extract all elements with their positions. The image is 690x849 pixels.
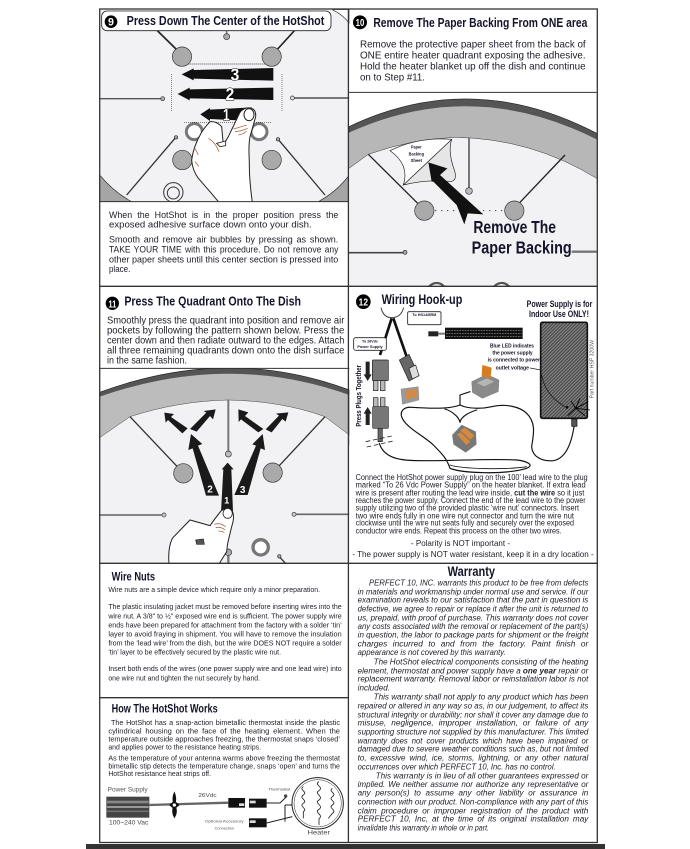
step 9 instructions: TAKE YOUR TIME with this procedure. Do not remove any	[109, 245, 339, 255]
large numbered arrows: 3	[240, 485, 246, 496]
panel: warranty	[358, 563, 589, 833]
how it works text: As the temperature of your antenna warms above freezing the thermostat	[108, 753, 341, 762]
step 9 title bar	[102, 11, 331, 31]
panel: how the HotShot works	[106, 702, 343, 837]
step 12 heading	[356, 292, 462, 309]
callout: blue LED: outlet voltage	[496, 366, 529, 372]
step 12 instructions: two wire ends fully in one wire nut connector and turn the wire nut	[356, 511, 575, 520]
plug: lower pair	[366, 398, 393, 447]
step 12 instructions: marked “To 26 Vdc Power Supply” on the heater blanket. If extra lead	[356, 481, 586, 490]
warranty text: charges incurred to and from the factory. Paint finish or	[358, 640, 589, 649]
step 10 instructions: ONE entire heater quadrant exposing the adhesive.	[360, 51, 586, 62]
warranty text: warranty does not cover products which have been impaired or	[358, 736, 589, 745]
step 12 instructions: supply utilizing two of the provided plastic ‘wire nut’ connectors. Insert	[356, 504, 580, 513]
step 11 instructions: pockets by following the pattern shown below. Press the	[107, 326, 344, 337]
step 11 instructions	[107, 316, 345, 367]
label: to 26Vdc power supply: Power Supply	[357, 344, 383, 349]
label: to 26Vdc power supply: To 26Vdc	[362, 338, 379, 343]
step 12 instructions: reaches the power supply. Connect the end of the lead wire to the power	[356, 496, 586, 505]
warranty text: connection with our product. Non-compliance with any part of this	[358, 797, 588, 806]
warranty text: The HotShot electrical components consisting of the heating	[374, 658, 589, 667]
paper backing sheet: Paper	[411, 145, 422, 150]
heater: Heater	[308, 830, 330, 837]
warranty text: replacement warranty. Removal labor or reinstallation labor is not	[358, 675, 589, 684]
power supply block: 100~240 Vac	[109, 821, 148, 827]
thermostat and wiring: Thermostat	[268, 788, 290, 792]
label: to HS14/8RM	[408, 312, 441, 325]
warranty text: repaired or altered in any way so as, in our judgement, to affect its	[358, 701, 588, 710]
step 12 instructions: conductor wire ends. Repeat this process on the other two wires.	[356, 526, 562, 535]
warranty text: defective, we agree to repair or replace it after the unit is returned to	[358, 605, 589, 614]
warranty text: supporting structure not supplied by this manufacturer. This limited	[358, 727, 589, 736]
power supply block: Power Supply	[108, 787, 149, 794]
wire nuts text: ends have been prepared for attachment from the factory with a solder ‘tin’	[108, 620, 342, 629]
callout: blue LED: Blue LED indicates	[490, 344, 534, 350]
how it works text: HotShot resistance heat strips off.	[108, 769, 211, 778]
panel: wire nuts	[107, 570, 342, 682]
illustration: dish center with hand and arrows	[100, 10, 349, 202]
step 9 title bar: Press Down The Center of the HotShot	[127, 13, 325, 28]
how it works text: The HotShot has a snap-action bimetallic thermostat inside the plastic	[111, 718, 340, 727]
step 11 heading: Press The Quadrant Onto The Dish	[124, 294, 301, 309]
arrow 3	[182, 68, 274, 81]
how it works text: bimetallic stip detects the temperature change, snaps ‘open’ and turns the	[108, 761, 340, 770]
warranty text: PERFECT 10, INC. warrants this product to be free from defects	[369, 579, 588, 588]
warranty text: us, prepaid, with proof of purchase. This warranty does not cover	[358, 613, 589, 622]
warning: power supply indoor use: Indoor Use ONLY!	[529, 309, 589, 319]
arrow 1: 1	[223, 105, 230, 124]
callout: blue LED: is connected to power	[488, 358, 541, 364]
step 11 heading	[106, 294, 301, 310]
warranty text: implied. We neither assume nor authorize any representative or	[358, 780, 589, 789]
warning: power supply indoor use: Power Supply is for	[527, 299, 593, 309]
large numbered arrows: 1	[224, 495, 229, 505]
warranty text: any costs associated with the removal or replacement of the part(s)	[358, 622, 589, 631]
note: polarity: - Polarity is NOT important -	[411, 538, 510, 548]
warranty text: appearance is not covered by this warranty.	[358, 648, 506, 657]
wiring diagram	[354, 308, 596, 473]
arrow 2: 2	[226, 84, 234, 104]
warranty text: claim procedure or improper registration of the product with	[358, 806, 589, 815]
note: water resistance: - The power supply is NOT water resistant, keep it in a dry location -	[352, 549, 594, 559]
warranty text: in materials and workmanship under normal use and service. If our	[358, 588, 589, 597]
panel: step 12 wiring hook-up	[352, 292, 596, 559]
arrow 3: 3	[231, 64, 240, 84]
arrow to paper backing	[428, 162, 483, 224]
wire nut: lever connector	[472, 365, 499, 398]
label: optional accessory connection: Optional Accessory	[205, 820, 244, 824]
icon: hand	[169, 508, 234, 565]
heater lead ring and wires	[380, 308, 407, 357]
warranty text: to, excessive wind, ice, storms, lightning, or any other natural	[358, 753, 589, 762]
callout: remove the paper backing	[472, 217, 572, 257]
warranty text: element, thermostat and power supply have a one year repair or	[358, 666, 589, 675]
how it works heading: How The HotShot Works	[112, 702, 218, 716]
step 10 heading: Remove The Paper Backing From ONE area	[373, 15, 588, 30]
wires	[379, 392, 574, 473]
warranty heading: Warranty	[448, 563, 495, 579]
illustration: dish quadrant with press pattern	[100, 368, 349, 566]
connector plugs	[228, 798, 267, 827]
wire nut: small	[401, 387, 419, 404]
wire nuts text: layer to avoid fraying in shipment. You will have to remove the insulation	[108, 629, 342, 638]
warranty text: damaged due to severe weather conditions such as, but not limited	[358, 745, 589, 754]
wire nuts text: one wire nut and tighten the nut securely by hand.	[108, 673, 260, 682]
how it works text: temperature outside approaches freezing, the thermostat snaps ‘closed’	[108, 735, 340, 744]
wire nuts text: Wire nuts are a simple device which require only a minor preparation.	[108, 585, 320, 594]
step 12 heading: 12	[359, 298, 368, 309]
step 12 heading: Wiring Hook-up	[382, 292, 462, 307]
circuit diagram	[106, 778, 343, 837]
bottom bar	[86, 844, 605, 849]
supply cable with wire nuts	[149, 791, 228, 818]
step 9 instructions: other paper sheets until this center section is pressed into	[109, 254, 338, 264]
wire nuts text: from the ‘lead wire’ from the dish, but the wire DOES NOT require a solder	[108, 638, 342, 647]
plug: right lead	[399, 354, 419, 381]
large numbered arrows	[188, 434, 265, 512]
callout: blue LED	[488, 344, 541, 372]
how it works text: and applies power to the resistance heating strips.	[108, 742, 261, 751]
warranty text: examination reveals to our satisfaction that the part in question is	[358, 596, 588, 605]
warranty text: PERFECT 10, Inc, at the time of its original installation may	[358, 815, 589, 824]
step 9 instructions	[109, 210, 339, 274]
warranty text: misuse, negligence, improper installation, or failure of any	[358, 719, 589, 728]
paper backing sheet: Backing	[409, 152, 424, 157]
label: to 26Vdc power supply	[354, 338, 386, 350]
step 9 instructions: place.	[109, 264, 130, 274]
small outward arrows	[164, 409, 288, 433]
warranty text: This warranty shall not apply to any product which has been	[374, 693, 589, 702]
heater strip	[428, 328, 523, 339]
illustration: peeling paper backing	[349, 99, 597, 302]
callout: remove the paper backing: Paper Backing	[472, 237, 572, 257]
supply cable with wire nuts: 26Vdc	[198, 793, 217, 799]
wire nuts text: Insert both ends of the wires (one power supply wire and one lead wire) into	[108, 664, 342, 673]
step 12 instructions	[355, 473, 588, 535]
wire nuts text: The plastic insulating jacket must be removed before inserting wires into the	[108, 602, 342, 611]
step 9 instructions: Smooth and remove air bubbles by pressing as shown.	[109, 235, 338, 245]
wire nut: large connector	[452, 425, 476, 452]
step 9 instructions: exposed adhesive surface down onto your dish.	[109, 219, 312, 229]
wire nuts text	[107, 585, 342, 682]
step 12 instructions: Connect the HotShot power supply plug on the 100' lead wire to the plug	[356, 473, 588, 482]
step 11 instructions: in the same fashion.	[107, 356, 187, 367]
warranty text: occurrences over which PERFECT 10, Inc. has no control.	[358, 762, 556, 771]
paper backing sheet	[390, 139, 455, 185]
panel: step 10 remove the paper backing	[349, 15, 597, 302]
wire nuts text: ‘tin’ layer to be effectively secured by the plastic wire nut.	[108, 648, 281, 657]
step 12 instructions: clockwise until the wire nut seats fully and securely over the exposed	[356, 519, 574, 528]
panel: step 11 press the quadrant	[100, 294, 349, 566]
heater	[292, 778, 343, 837]
warranty text: This warranty is in lieu of all other guarantees expressed or	[376, 771, 589, 780]
callout: blue LED: the power supply	[492, 351, 533, 357]
paper backing sheet: Sheet	[411, 158, 422, 163]
label: optional accessory connection	[205, 820, 244, 830]
power supply unit	[541, 322, 590, 426]
wire nuts heading: Wire Nuts	[112, 570, 155, 584]
warranty text: in question, the labor to package parts for shipment or the freight	[358, 631, 589, 640]
panel: step 9 press down the center	[100, 10, 349, 274]
arrow 1	[200, 107, 252, 121]
step 11 instructions: all three remaining quadrants down onto the dish surface	[107, 346, 344, 357]
step 9 title bar: 9	[108, 17, 114, 29]
label: press plugs together: Press Plugs Together	[354, 365, 363, 427]
step 10 instructions: on to Step #11.	[360, 72, 425, 83]
step 11 instructions: center down and then radiate outward to the edges. Attach	[107, 335, 344, 346]
label: optional accessory connection: Connection	[215, 826, 234, 830]
label: to HS14/8RM: To HS14/8RM	[412, 313, 436, 317]
step 11 instructions: Smoothly press the quadrant into position and remove air	[107, 316, 345, 327]
large numbered arrows: 2	[207, 484, 213, 495]
how it works text	[108, 718, 341, 778]
page frame and panel dividers	[100, 9, 597, 842]
warranty text: any person(s) to assume any other liability or assurance in	[358, 789, 589, 798]
arrows: press plugs together	[364, 362, 372, 425]
icon: hand pressing	[192, 108, 256, 202]
step 9 instructions: When the HotShot is in the proper position press the	[109, 210, 338, 220]
warranty text: structural integrity or durability; nor shall it cover any damage due to	[358, 710, 589, 719]
power supply block	[106, 787, 149, 827]
wire nuts text: wire nut. A 3/8" to ½" exposed wire end is sufficient. The power supply wire	[107, 611, 342, 620]
step 10 instructions	[360, 40, 586, 83]
thermostat and wiring	[267, 788, 292, 823]
step 10 instructions: Hold the heater blanket up off the dish and continue	[360, 61, 586, 72]
warranty text: invalidate this warranty in whole or in part.	[358, 824, 489, 833]
step 10 instructions: Remove the protective paper sheet from the back of	[360, 40, 586, 51]
warning: power supply indoor use	[527, 299, 593, 319]
plug: upper pair	[372, 360, 388, 391]
step 10 heading: 10	[356, 18, 365, 29]
how it works text: cylindrical housing on the face of the heating element. When the	[108, 727, 340, 736]
warranty text	[358, 579, 589, 833]
part number: Part number HSP 3200W	[590, 339, 596, 398]
callout: remove the paper backing: Remove The	[473, 217, 556, 237]
arrow 2	[178, 88, 274, 100]
step 12 instructions: wire is present after routing the lead wire inside, cut the wire so it just	[355, 489, 585, 498]
step 11 heading: 11	[108, 299, 117, 310]
warranty text: included.	[358, 683, 390, 692]
